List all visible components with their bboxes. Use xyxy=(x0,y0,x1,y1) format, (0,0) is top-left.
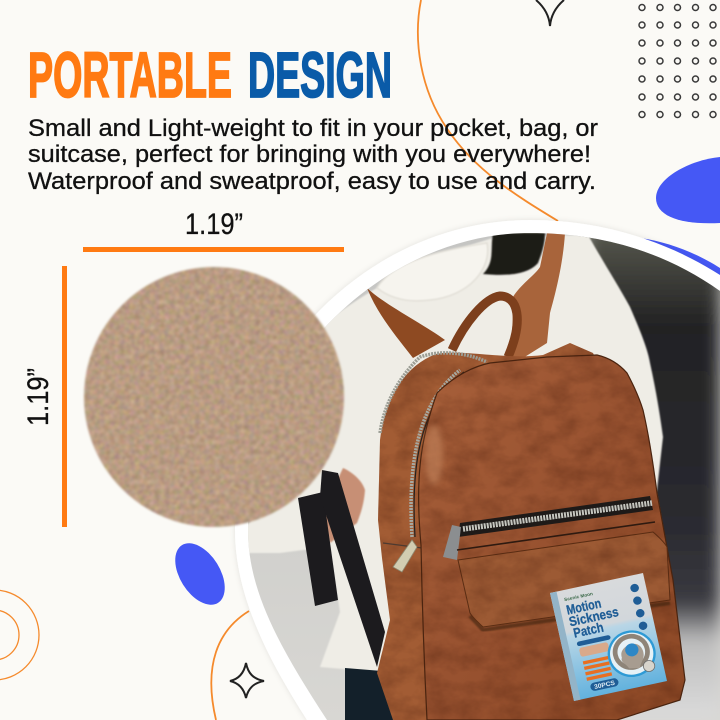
leather highlight xyxy=(425,425,443,485)
diagonal strap xyxy=(320,470,385,667)
description text: Small and Light-weight to fit in your pocket, bag, or xyxy=(28,115,598,142)
photo backdrop xyxy=(240,225,720,720)
left strap with end loop xyxy=(298,492,338,606)
orange arc: bottom xyxy=(211,611,249,720)
product name: Motion xyxy=(565,596,603,618)
width line xyxy=(83,247,344,252)
left shoulder strap xyxy=(367,288,445,358)
photo: person with backpack xyxy=(240,225,720,720)
product name xyxy=(566,600,619,638)
patch strip xyxy=(579,642,610,657)
box spine xyxy=(550,592,581,701)
description text: suitcase, perfect for bringing with you everywhere! xyxy=(28,141,591,168)
hair ring xyxy=(612,633,651,671)
backpack inner zipper xyxy=(411,370,460,537)
zipper slot xyxy=(458,496,653,537)
description text xyxy=(28,115,598,195)
shirt hood xyxy=(377,243,488,301)
title: PORTABLE xyxy=(28,39,232,111)
blurred dark street xyxy=(585,225,720,720)
blue blob: behind photo ring xyxy=(640,238,720,300)
zipper pull xyxy=(393,540,417,572)
width label: 1.19” xyxy=(185,208,243,241)
height line xyxy=(62,266,67,527)
pocket band seam xyxy=(457,522,655,550)
head ring xyxy=(605,627,659,680)
height label: 1.19” xyxy=(22,368,55,426)
hand xyxy=(323,468,365,543)
blue blob: right xyxy=(656,157,720,223)
info icons xyxy=(630,583,648,631)
brain dots xyxy=(624,642,640,658)
dot grid xyxy=(639,4,716,118)
brand: Scenic Moon xyxy=(564,591,593,602)
backpack front panel xyxy=(419,355,685,720)
icon: bottom sparkle xyxy=(230,663,264,698)
round patch xyxy=(84,267,344,527)
head profile xyxy=(619,642,647,671)
backpack rear body xyxy=(377,343,685,720)
box face xyxy=(550,573,667,701)
backpack outer zipper xyxy=(380,353,487,433)
dimension: height xyxy=(22,266,67,527)
hair xyxy=(483,233,545,275)
pocket zipper xyxy=(443,496,653,560)
photo ring xyxy=(235,220,720,720)
icon: top sparkle xyxy=(536,0,564,26)
white shirt xyxy=(245,235,663,700)
label bar xyxy=(576,635,611,646)
product name: Sickness xyxy=(568,604,620,629)
dark trousers xyxy=(345,668,393,720)
chrome zipper end xyxy=(443,525,461,560)
product name: Patch xyxy=(572,620,605,641)
right shoulder strap xyxy=(512,233,565,356)
title: DESIGN xyxy=(248,39,392,111)
description text: Waterproof and sweatproof, easy to use and carry. xyxy=(28,168,596,195)
black webbing straps xyxy=(298,470,385,667)
front pocket flap xyxy=(458,532,670,627)
carry handle xyxy=(452,296,517,357)
orange curve: top xyxy=(418,0,558,221)
pack count pill: 30PCS xyxy=(594,680,616,691)
dimension: width xyxy=(83,208,344,252)
product box xyxy=(550,573,667,701)
pocket side seam band xyxy=(383,543,422,548)
face badge xyxy=(642,659,656,673)
blue blob: lower left xyxy=(165,535,235,613)
head illustration xyxy=(608,630,656,677)
flap drop shadow xyxy=(470,603,670,630)
concentric orange circles xyxy=(0,590,39,680)
orange feature tags xyxy=(583,656,612,681)
zipper teeth xyxy=(463,503,652,529)
